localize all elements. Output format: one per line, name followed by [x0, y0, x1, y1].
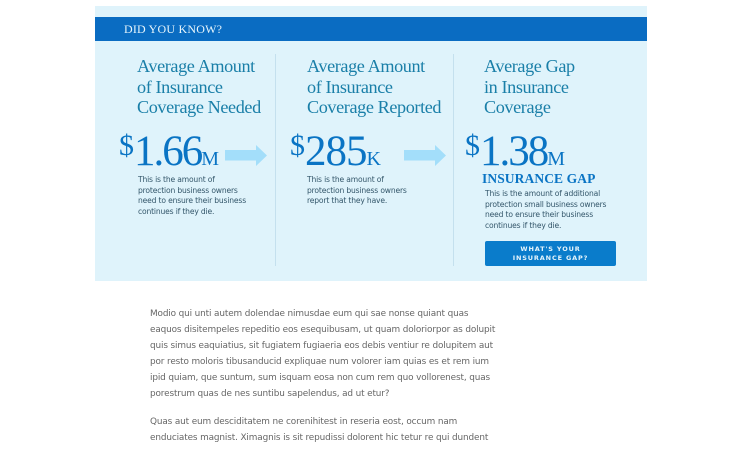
- column 2 heading: Coverage Reported: [307, 97, 441, 117]
- heading: did you know: DID YOU KNOW?: [124, 22, 222, 36]
- button label: INSURANCE GAP?: [513, 254, 588, 262]
- column 2 description: This is the amount of: [307, 175, 384, 184]
- column 2 heading: Average Amount: [307, 56, 425, 76]
- column 3 description: [484, 189, 606, 230]
- column 1 description: protection business owners: [138, 186, 238, 195]
- column 1 heading: Average Amount: [137, 56, 255, 76]
- column 1 figure: $1.66M: [119, 128, 219, 175]
- column 1 description: This is the amount of: [138, 175, 215, 184]
- body paragraph 1: Modio qui unti autem dolendae nimusdae eum qui sae nonse quiant quas: [150, 309, 468, 319]
- button label: [513, 244, 588, 262]
- column 2 heading: of Insurance: [307, 76, 393, 96]
- column 3 description: continues if they die.: [485, 221, 561, 230]
- body paragraph 2: [150, 417, 488, 443]
- column 3 figure: $1.38M: [465, 128, 565, 175]
- body paragraph 2: Quas aut eum desciditatem ne corenihitest in reseria eost, occum nam: [150, 417, 457, 427]
- column 3 description: need to ensure their business: [485, 210, 593, 219]
- divider 1: [275, 54, 276, 266]
- column 3 heading: Average Gap: [484, 56, 575, 76]
- header bar: [95, 17, 647, 41]
- divider 2: [453, 54, 454, 266]
- button label: WHAT'S YOUR: [520, 244, 581, 252]
- column 2 heading: [307, 56, 442, 117]
- arrow 1: [225, 145, 267, 166]
- column 3 heading: Coverage: [484, 97, 550, 117]
- body paragraph 1: quis simus eaquiatius, sit fugiatem fugiaeria eos debis ventiur re dolupitem aut: [150, 341, 493, 351]
- column 1 heading: Coverage Needed: [137, 97, 261, 117]
- body paragraph 1: eaquos disitempeles repeditio eos esequibusam, ut quam doloriorpor as dolupit: [150, 325, 495, 335]
- column 2 description: report that they have.: [307, 196, 387, 205]
- column 3 heading: [484, 56, 575, 117]
- body paragraph 1: [150, 309, 496, 399]
- insurance gap label: INSURANCE GAP: [482, 171, 595, 186]
- button: what's your insurance gap: [485, 241, 616, 266]
- column 1 heading: of Insurance: [137, 76, 223, 96]
- body paragraph 1: porestrum quas de nes suntibu sapelendus, ad ut etur?: [150, 389, 389, 399]
- column 1 description: continues if they die.: [138, 207, 214, 216]
- column 1 heading: [137, 56, 261, 117]
- column 2 description: protection business owners: [307, 186, 407, 195]
- column 3 description: This is the amount of additional: [485, 189, 600, 198]
- column 2 figure: $285K: [290, 128, 381, 175]
- column 3 description: protection small business owners: [485, 200, 606, 209]
- column 3 heading: in Insurance: [484, 76, 569, 96]
- column 1 description: need to ensure their business: [138, 196, 246, 205]
- panel: did you know: [95, 6, 647, 281]
- body paragraph 1: ipid quiam, que suntum, sum isquam eosa non cum rem quo vollorenest, quas: [150, 373, 490, 383]
- column 1 description: [138, 175, 246, 216]
- arrow 2: [404, 145, 446, 166]
- body paragraph 2: enduciates magnist. Ximagnis is sit repudissi dolorent hic tetur re qui dundent: [150, 433, 488, 443]
- body paragraph 1: por resto moloris tibusanducid expliquae num volorer iam quias es et rem ium: [150, 357, 489, 367]
- column 2 description: [306, 175, 407, 205]
